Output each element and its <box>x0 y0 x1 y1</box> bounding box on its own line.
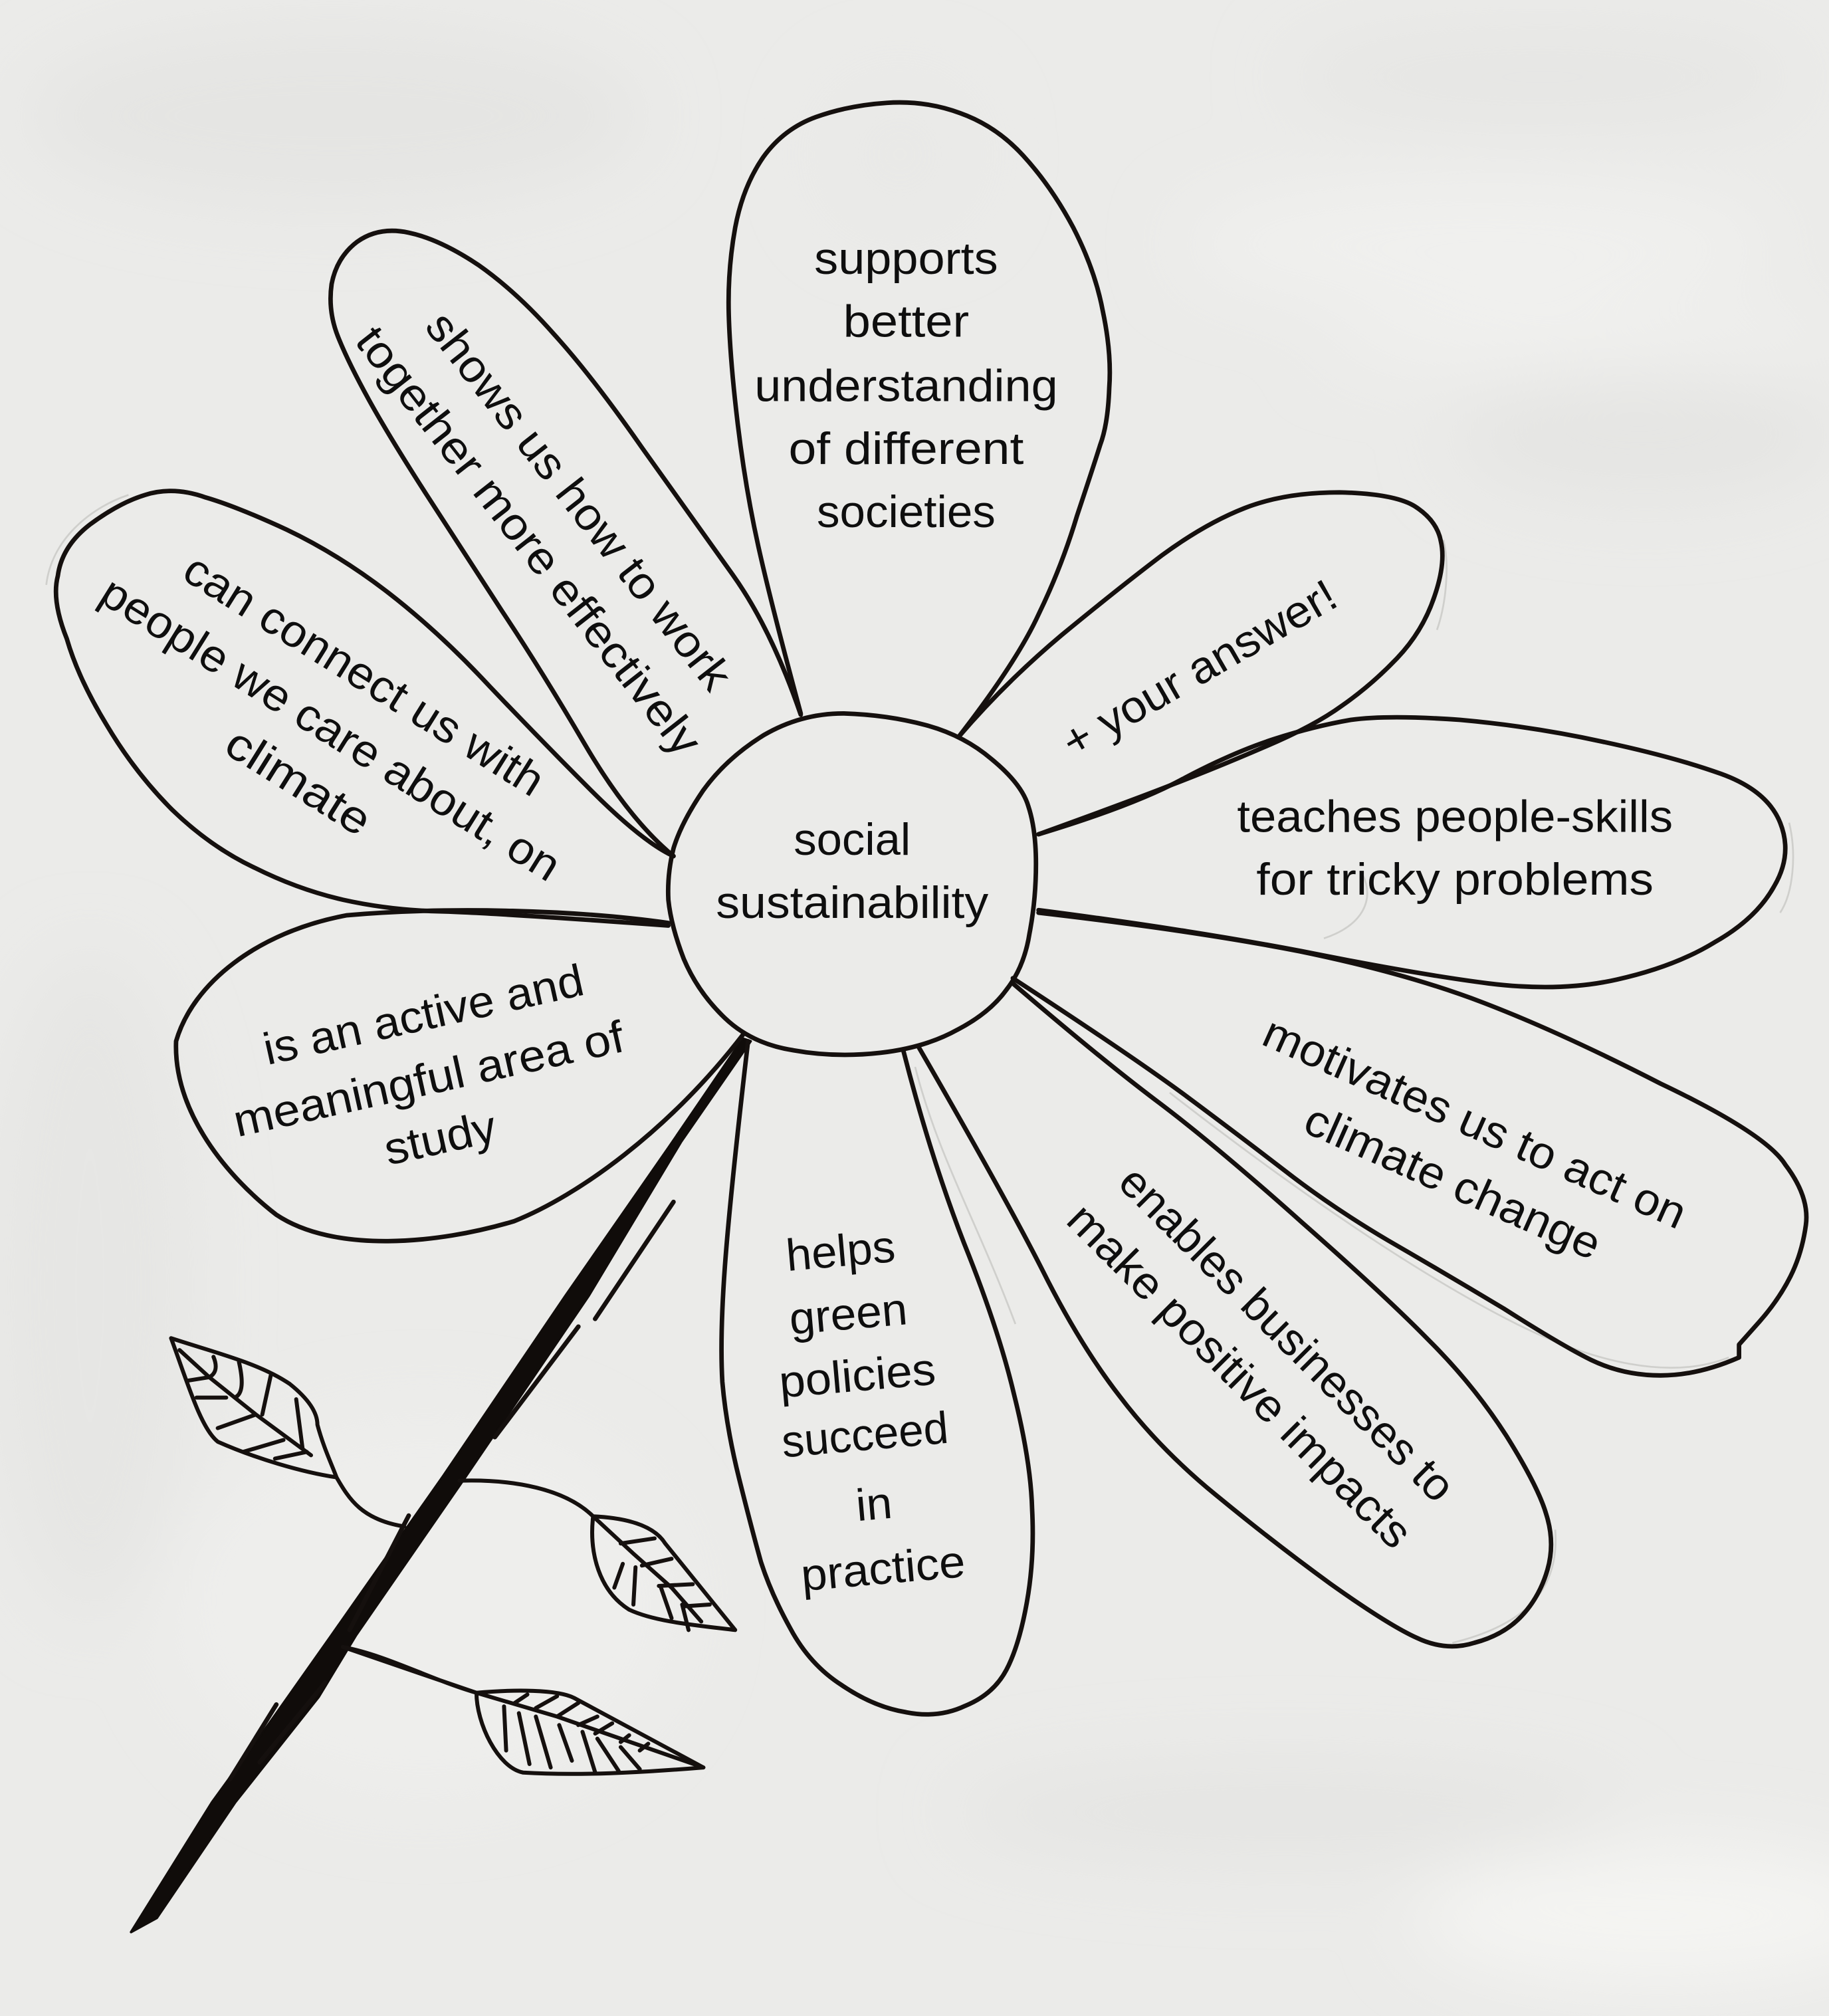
label: active area of study <box>229 955 629 1175</box>
petal: top <box>728 102 1110 736</box>
petal: motivates <box>1013 913 1806 1375</box>
petal: enables businesses <box>919 983 1551 1646</box>
label: social sustainability <box>716 815 988 928</box>
label: motivates us: motivates us to act on <box>1255 1007 1694 1239</box>
petal: active area of study <box>176 911 743 1241</box>
label: helps green policies: succeed <box>780 1403 950 1467</box>
label: helps green policies <box>777 1222 967 1601</box>
petal: shows <box>330 231 801 856</box>
leaf: upper left <box>171 1338 404 1527</box>
label: active area of study: study <box>379 1102 501 1175</box>
petal: connect <box>56 491 673 925</box>
leaf: lower <box>343 1647 703 1774</box>
label: supports better understanding: of different <box>788 424 1024 474</box>
label: shows us how: together more effectively <box>346 317 711 765</box>
label: helps green policies: green <box>787 1284 909 1344</box>
label: motivates us <box>1230 1007 1694 1296</box>
label: can connect: climate <box>217 718 380 845</box>
label: helps green policies: policies <box>777 1344 938 1408</box>
label: supports better understanding: supports <box>814 234 998 284</box>
petal: helps green policies <box>722 1041 1033 1714</box>
label: enables businesses: make positive impacts <box>1057 1194 1422 1558</box>
label: motivates us: climate change <box>1297 1095 1608 1270</box>
label: your answer: + your answer! <box>1053 570 1345 768</box>
label: teaches people-skills: teaches people-skills <box>1237 792 1673 841</box>
label: teaches people-skills <box>1237 792 1673 905</box>
label: can connect: people we care about, on <box>92 567 570 891</box>
centre circle <box>668 713 1036 1055</box>
label: supports better understanding: societies <box>817 487 996 537</box>
label: teaches people-skills: for tricky problems <box>1256 855 1654 905</box>
label: social sustainability: sustainability <box>716 878 988 928</box>
label: can connect: can connect us with <box>175 544 553 806</box>
label: helps green policies: in <box>854 1478 894 1531</box>
petal: teaches people-skills <box>1039 717 1785 987</box>
label: active area of study: meaningful area of <box>229 1012 629 1147</box>
flower <box>56 102 1806 1714</box>
stem <box>131 1039 750 1932</box>
label: supports better understanding: better <box>843 297 969 347</box>
label: supports better understanding: understanding <box>754 361 1058 411</box>
leaves and twigs <box>171 1338 735 1774</box>
label: helps green policies: helps <box>784 1222 897 1281</box>
leaf: right <box>459 1480 735 1630</box>
label: shows us how: shows us how to work <box>416 302 742 700</box>
label: helps green policies: practice <box>799 1537 967 1601</box>
label: social sustainability: social <box>794 815 911 865</box>
faint pencil outlines <box>47 495 1793 1643</box>
petal: your answer <box>959 493 1442 834</box>
label: active area of study: is an active and <box>259 955 588 1075</box>
label: supports better understanding <box>754 234 1058 537</box>
label: enables businesses: enables businesses to <box>1109 1157 1464 1512</box>
